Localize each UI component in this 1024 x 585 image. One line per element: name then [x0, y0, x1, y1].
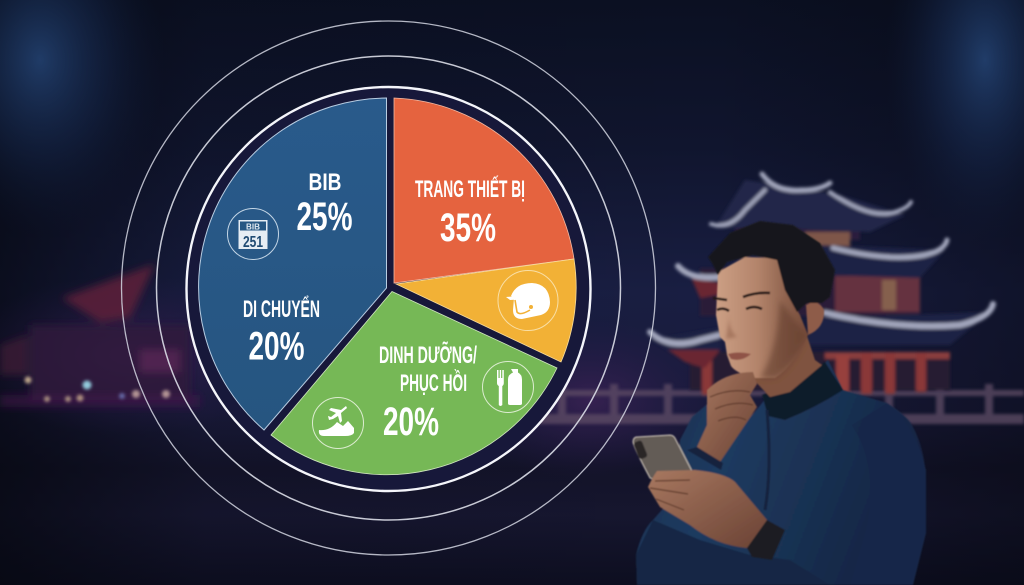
label: di chuyển: DI CHUYỂN [243, 295, 320, 323]
background: balustrade [530, 384, 1024, 424]
label: BIB: BIB [308, 169, 342, 196]
watch [747, 520, 785, 560]
nose shadow [726, 312, 737, 339]
face [716, 257, 808, 378]
raised hand [697, 372, 757, 462]
raised hand fingers [710, 391, 753, 421]
background: bokeh lights [24, 376, 170, 402]
ear [806, 302, 824, 335]
slice: BIB and di chuyển [199, 98, 386, 430]
slice: dinh dưỡng [271, 292, 557, 475]
icon: helmet [498, 270, 558, 330]
background: blurred temple left [0, 264, 200, 407]
value: trang thiết bị 35%: 35% [440, 206, 496, 250]
label: trang thiết bị: TRANG THIẾT BỊ [415, 175, 525, 203]
jacket [636, 360, 926, 585]
icon: shoe and plane [312, 398, 364, 448]
lips [728, 352, 751, 360]
value: di chuyển 20%: 20% [248, 324, 304, 368]
value: BIB 25%: 25% [296, 195, 352, 239]
background: blurred pagoda right [650, 174, 993, 395]
pie chart rings [122, 21, 656, 555]
icon: bib number: 251 [243, 234, 263, 251]
slice: trang thiết bị [394, 98, 574, 283]
label: dinh dưỡng / phục hồi: PHỤC HỒI [400, 369, 467, 397]
label: dinh dưỡng / phục hồi: DINH DƯỠNG/ [379, 341, 477, 369]
value: dinh dưỡng 20%: 20% [383, 400, 439, 444]
icon: bib number: BIB [246, 222, 260, 232]
jacket sleeve shading [850, 403, 926, 585]
face shading [760, 300, 806, 378]
neck [752, 330, 822, 397]
hair [708, 221, 835, 312]
icon: fork and bottle [482, 362, 534, 412]
icon: bib number [228, 208, 278, 260]
person [633, 221, 926, 585]
holding hand fingers [650, 480, 690, 510]
collar [762, 362, 843, 420]
pie chart [199, 98, 576, 475]
slice: trang thiết bị yellow [396, 259, 576, 362]
eyes and brows [713, 293, 770, 300]
jacket lower arm [636, 520, 830, 585]
holding hand [648, 470, 767, 548]
jacket zipper [765, 410, 769, 510]
phone camera [633, 440, 648, 460]
jacket cuff [687, 447, 723, 470]
phone [633, 435, 695, 494]
